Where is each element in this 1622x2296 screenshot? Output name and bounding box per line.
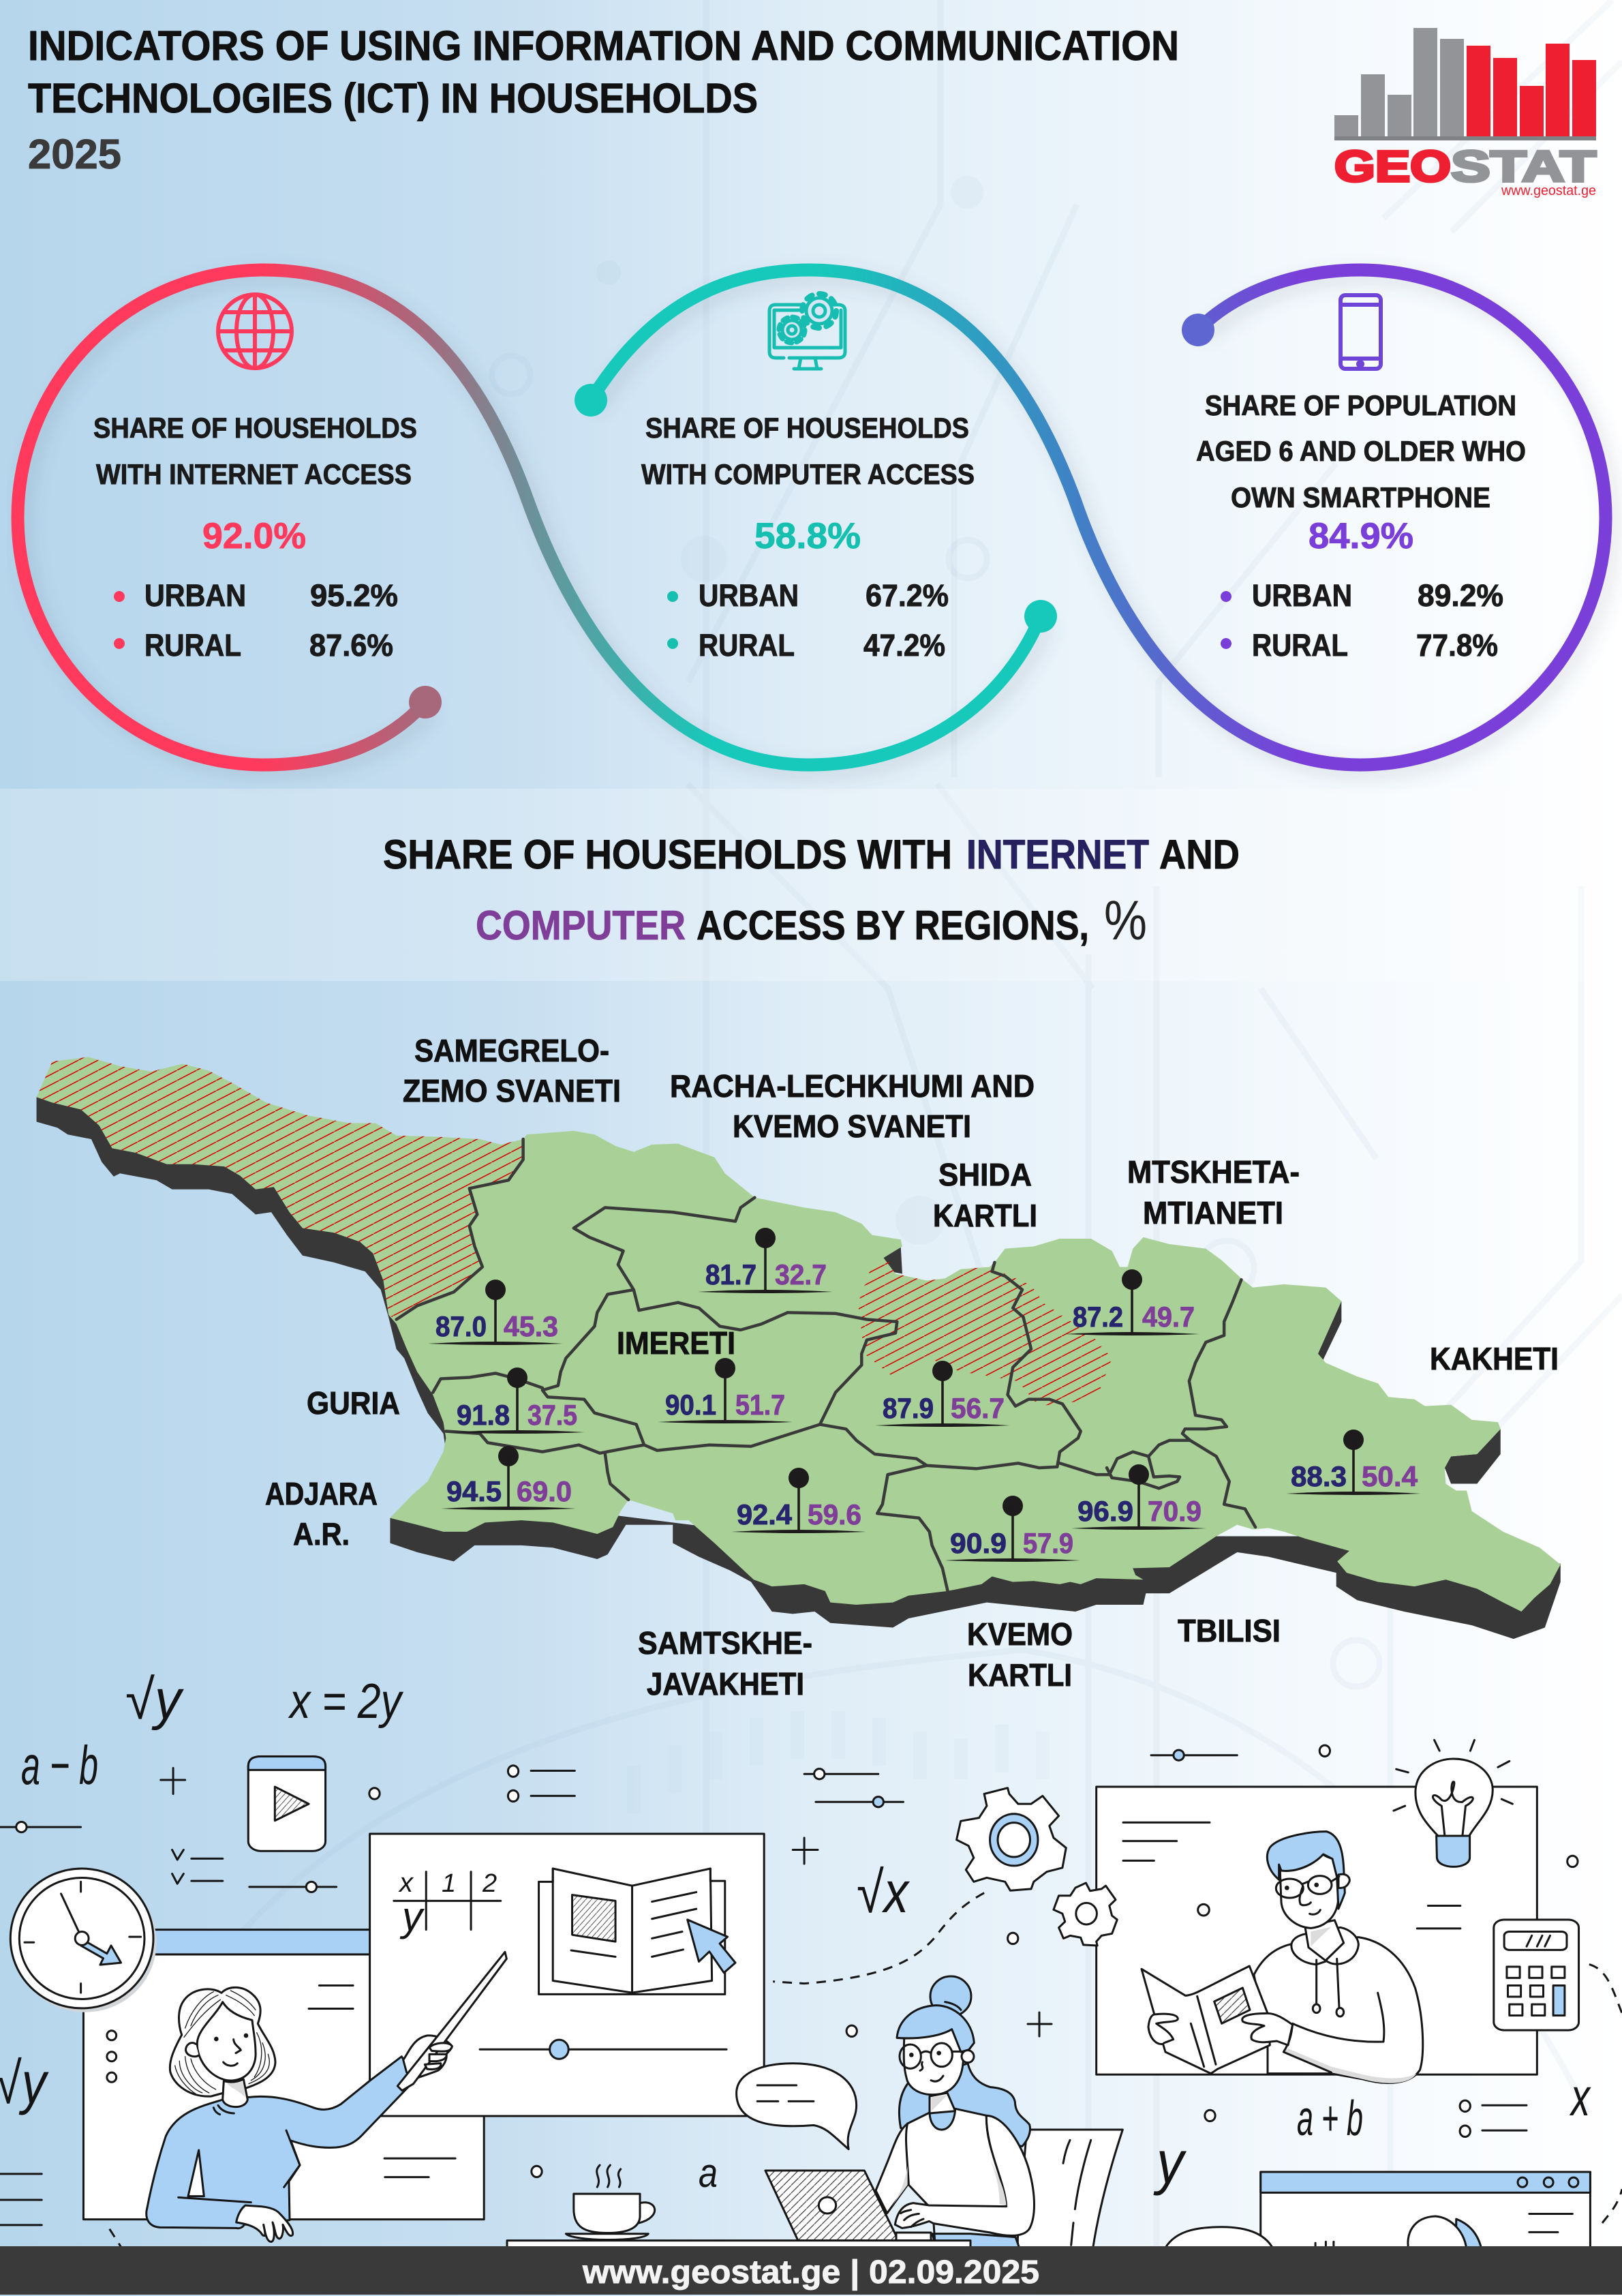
map pin: Guria xyxy=(450,1368,585,1434)
region labels: JAVAKHETI xyxy=(647,1666,804,1702)
panel: smartphone ownership: SHARE OF POPULATION xyxy=(1205,389,1516,421)
region labels: MTIANETI xyxy=(1143,1195,1283,1230)
map pin: Tbilisi xyxy=(1071,1464,1206,1530)
icon: light bulb xyxy=(1394,1740,1512,1867)
section heading: % xyxy=(1104,890,1147,952)
section heading: COMPUTER xyxy=(476,903,686,948)
math letter: y: y xyxy=(1153,2128,1187,2196)
icon: smartphone xyxy=(1341,295,1381,369)
laptop xyxy=(765,2171,898,2241)
panel: smartphone ownership: URBAN xyxy=(1252,578,1352,613)
teacher face xyxy=(186,2002,256,2081)
board table labels: x xyxy=(398,1868,414,1898)
map pin: Samegrelo-Zemo Svaneti: 45.3 xyxy=(504,1310,558,1342)
teacher neck xyxy=(223,2079,247,2107)
section heading xyxy=(383,832,1240,952)
hoodie strings and arm xyxy=(1283,1959,1384,2072)
bottom-right window xyxy=(1261,2172,1590,2260)
math formula: x = 2y: x = 2y xyxy=(288,1674,403,1729)
math letter: x: x xyxy=(1569,2067,1591,2127)
logo: Geostat xyxy=(1334,28,1596,198)
panel: smartphone ownership: 77.8% xyxy=(1416,628,1498,663)
chair xyxy=(1017,2130,1122,2250)
panel: smartphone ownership: 84.9% xyxy=(1309,516,1413,556)
title xyxy=(28,22,1179,177)
map pin: Kvemo Kartli: 90.9 xyxy=(950,1527,1007,1559)
coffee cup xyxy=(566,2165,655,2240)
man head xyxy=(1267,1832,1349,1928)
hatched area: Tskhinvali region xyxy=(858,1258,1112,1406)
panel: computer access: RURAL xyxy=(699,628,795,663)
hatched area: Abkhazia xyxy=(37,1057,523,1319)
region labels: MTSKHETA- xyxy=(1127,1154,1300,1190)
map of Georgia xyxy=(37,1057,1561,1639)
section heading: SHARE OF HOUSEHOLDS WITH xyxy=(383,832,952,877)
section heading: AND xyxy=(1159,832,1240,877)
panel: smartphone ownership: AGED 6 AND OLDER WHO xyxy=(1196,435,1526,467)
map pin: Kvemo Kartli: 57.9 xyxy=(1023,1527,1073,1559)
icon: clock xyxy=(10,1869,157,2012)
panel: computer access: 67.2% xyxy=(866,578,949,613)
student top and arms xyxy=(876,2109,1034,2250)
board table labels: 2 xyxy=(482,1869,497,1898)
board table labels xyxy=(398,1868,497,1939)
panel: computer access: SHARE OF HOUSEHOLDS xyxy=(645,412,969,444)
map pin: Racha-Lechkhumi and Kvemo Svaneti xyxy=(698,1228,833,1293)
region labels: SHIDA xyxy=(938,1157,1032,1192)
man hands xyxy=(1148,2013,1293,2045)
man reading xyxy=(1123,1822,1423,2083)
map pin: Adjara: 94.5 xyxy=(446,1475,502,1507)
man neck xyxy=(1305,1920,1344,1961)
cloud shape xyxy=(1161,2227,1276,2257)
icon: globe xyxy=(218,294,292,368)
map pin: Tbilisi: 96.9 xyxy=(1077,1495,1133,1527)
region labels: KARTLI xyxy=(968,1657,1072,1693)
open magazine xyxy=(1142,1966,1270,2074)
ribbon: red to teal curve xyxy=(18,270,1057,765)
icon: large gear xyxy=(957,1788,1066,1890)
teacher xyxy=(147,1952,506,2241)
map pin: Guria: 91.8 xyxy=(457,1399,510,1431)
region labels: ZEMO SVANETI xyxy=(403,1073,621,1108)
region labels: KVEMO SVANETI xyxy=(733,1108,971,1144)
man window xyxy=(1097,1787,1537,2074)
region labels: KVEMO xyxy=(967,1616,1073,1652)
board table labels: 1 xyxy=(442,1869,456,1898)
decorative doodles xyxy=(0,1766,575,2247)
student at laptop xyxy=(507,1976,1122,2250)
map pin: Imereti xyxy=(658,1358,793,1423)
student head xyxy=(897,2006,974,2113)
bubble text lines xyxy=(757,2085,814,2101)
title: INDICATORS OF USING INFORMATION AND COMMUNICATION xyxy=(28,22,1179,69)
title: TECHNOLOGIES (ICT) IN HOUSEHOLDS xyxy=(28,75,758,121)
man hoodie xyxy=(1254,1927,1423,2083)
region labels xyxy=(265,1033,1559,1702)
footer xyxy=(0,2246,1622,2295)
math formula: a - b: a − b xyxy=(21,1735,98,1796)
logo: Geostat: GEO xyxy=(1334,142,1451,191)
map pin: Racha-Lechkhumi and Kvemo Svaneti: 81.7 xyxy=(705,1258,756,1290)
map pin: Imereti: 51.7 xyxy=(735,1389,785,1421)
region labels: KAKHETI xyxy=(1430,1341,1559,1376)
map pin: Shida Kartli: 56.7 xyxy=(951,1392,1005,1424)
section heading: INTERNET xyxy=(966,832,1149,877)
panel: internet access: 95.2% xyxy=(310,578,398,613)
region labels: IMERETI xyxy=(617,1325,735,1361)
window lines and dot xyxy=(1123,1822,1210,1916)
panel: computer access: URBAN xyxy=(699,578,799,613)
panel: internet access: 92.0% xyxy=(202,516,306,556)
icon: small gear xyxy=(1054,1883,1117,1946)
teacher hair xyxy=(170,1987,275,2096)
heading band xyxy=(0,789,1622,981)
icon: video player xyxy=(248,1756,326,1851)
panel: internet access: WITH INTERNET ACCESS xyxy=(96,458,412,490)
map pin: Mtskheta-Mtianeti: 49.7 xyxy=(1142,1301,1195,1333)
map pin: Samtskhe-Javakheti xyxy=(731,1468,866,1533)
region labels: ADJARA xyxy=(265,1476,378,1511)
region labels: SAMTSKHE- xyxy=(638,1625,812,1661)
panel: internet access: URBAN xyxy=(144,578,246,613)
illustration: e-learning scene xyxy=(0,1669,1622,2260)
panel: computer access xyxy=(641,294,975,663)
map pin: Kakheti: 88.3 xyxy=(1291,1460,1347,1492)
plus sign doodle xyxy=(1028,2012,1052,2036)
map pin: Mtskheta-Mtianeti xyxy=(1065,1269,1199,1335)
lesson window xyxy=(83,1930,484,2220)
map pin: Samegrelo-Zemo Svaneti xyxy=(428,1280,563,1345)
region labels: GURIA xyxy=(307,1385,400,1421)
math formula: root x: √x xyxy=(857,1860,910,1925)
map pin: Samtskhe-Javakheti: 59.6 xyxy=(808,1498,861,1530)
map pin: Samegrelo-Zemo Svaneti: 87.0 xyxy=(435,1310,487,1342)
map pin: Racha-Lechkhumi and Kvemo Svaneti: 32.7 xyxy=(775,1258,827,1290)
doodles: right side xyxy=(773,1745,1622,2223)
map pin: Kvemo Kartli xyxy=(945,1496,1080,1562)
panel: computer access: WITH COMPUTER ACCESS xyxy=(641,458,975,490)
regional borders xyxy=(397,1139,1255,1591)
icon: open book xyxy=(539,1869,735,1994)
presentation board xyxy=(370,1834,764,2116)
panel: internet access xyxy=(93,294,417,663)
ribbon curve shadows xyxy=(25,277,1612,772)
board table labels: y xyxy=(399,1894,425,1939)
map pin: Samtskhe-Javakheti: 92.4 xyxy=(737,1498,793,1530)
math letter: a: a xyxy=(699,2150,718,2196)
panel: smartphone ownership: 89.2% xyxy=(1418,578,1503,613)
region labels: KARTLI xyxy=(933,1198,1037,1233)
map pin: Guria: 37.5 xyxy=(527,1399,577,1431)
map pin: Adjara xyxy=(441,1446,576,1510)
region labels: A.R. xyxy=(293,1516,350,1552)
map pin: Kakheti: 50.4 xyxy=(1362,1460,1418,1492)
panel: internet access: RURAL xyxy=(144,628,241,663)
map pin: Imereti: 90.1 xyxy=(665,1389,716,1421)
panel: internet access: 87.6% xyxy=(309,628,393,663)
map pin: Kakheti xyxy=(1286,1430,1421,1495)
panel: smartphone ownership xyxy=(1196,295,1526,663)
map pin: Shida Kartli xyxy=(875,1361,1010,1427)
panel: smartphone ownership: RURAL xyxy=(1252,628,1348,663)
logo: Geostat: www.geostat.ge xyxy=(1501,183,1596,198)
panel: computer access: 58.8% xyxy=(754,516,861,556)
ribbon: teal to purple curve xyxy=(575,270,1606,765)
map pin: Adjara: 69.0 xyxy=(517,1475,572,1507)
math formula: root y: √y xyxy=(125,1669,185,1731)
student hair xyxy=(899,1976,1030,2146)
title: 2025 xyxy=(28,131,121,177)
footer: www.geostat.ge | 02.09.2025 xyxy=(582,2254,1039,2291)
map pin: Shida Kartli: 87.9 xyxy=(883,1392,934,1424)
icon: calculator xyxy=(1494,1920,1579,2030)
panel: smartphone ownership: OWN SMARTPHONE xyxy=(1231,481,1490,513)
teacher sweater xyxy=(147,2057,416,2229)
window lines xyxy=(1417,1905,1460,1929)
speech bubble xyxy=(737,2064,857,2149)
panel: internet access: SHARE OF HOUSEHOLDS xyxy=(93,412,417,444)
map pin: Tbilisi: 70.9 xyxy=(1148,1495,1202,1527)
desk and keyboard xyxy=(507,2233,970,2250)
pointer and hand xyxy=(397,1952,506,2091)
teacher resting hand xyxy=(236,2205,293,2241)
math formula: a + b: a + b xyxy=(1297,2091,1363,2146)
map pin: Mtskheta-Mtianeti: 87.2 xyxy=(1073,1301,1123,1333)
region labels: TBILISI xyxy=(1178,1613,1281,1648)
region labels: SAMEGRELO- xyxy=(414,1033,609,1068)
region labels: RACHA-LECHKHUMI AND xyxy=(670,1068,1035,1104)
section heading: ACCESS BY REGIONS, xyxy=(697,903,1089,948)
logo: Geostat: STAT xyxy=(1451,142,1596,191)
panel: computer access: 47.2% xyxy=(863,628,945,663)
icon: monitor with gears xyxy=(769,294,845,369)
